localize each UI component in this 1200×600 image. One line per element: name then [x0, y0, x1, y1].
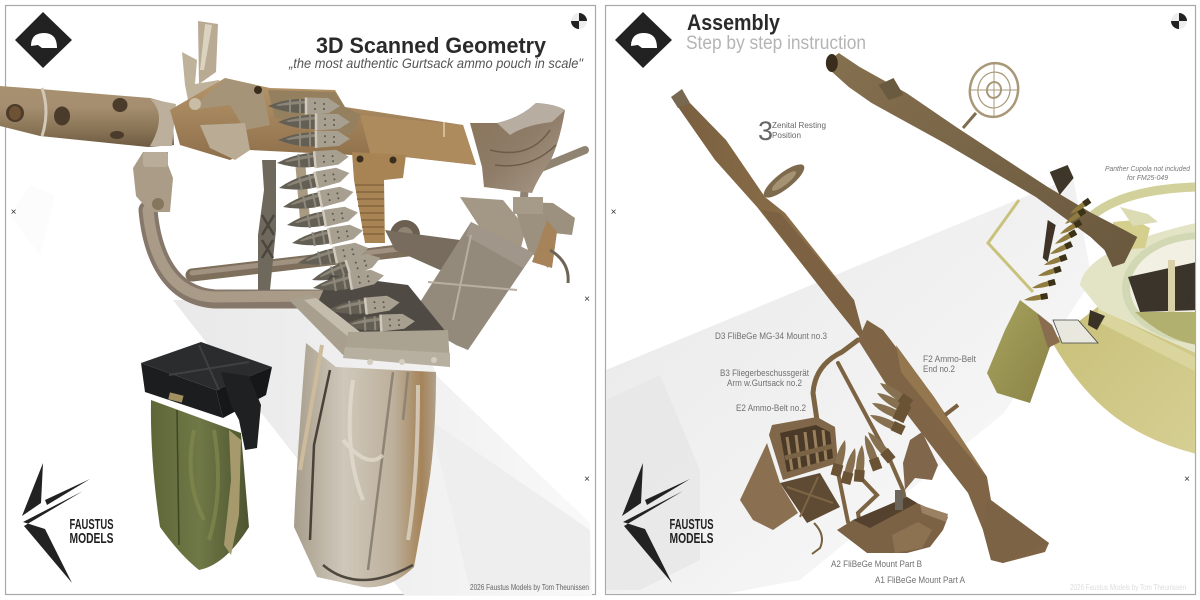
step caption: Zenital Resting [772, 120, 826, 130]
open lid [410, 222, 534, 350]
stock [470, 103, 565, 193]
crop marks: × [1184, 294, 1190, 305]
registration mark [571, 13, 587, 29]
crop marks: × [584, 474, 590, 485]
mount base [837, 490, 948, 553]
helmet logo [615, 12, 672, 68]
step caption [772, 120, 826, 140]
crop marks [11, 207, 590, 485]
registration mark [1171, 13, 1187, 29]
hull rim band [1098, 308, 1197, 372]
front bipod clevis [133, 152, 173, 212]
part labels: A1 FliBeGe Mount Part A [875, 575, 965, 585]
large canvas pouch [294, 343, 436, 587]
barrel and receiver [826, 53, 1137, 267]
yellow mount arm [988, 200, 1033, 292]
title: 3D Scanned Geometry [316, 33, 547, 58]
crop marks: × [11, 207, 17, 218]
crop marks: × [1184, 474, 1190, 485]
panel frame [606, 6, 1196, 594]
muzzle and barrel [671, 89, 866, 345]
cupola note [1105, 164, 1191, 182]
Faustus Models logo [22, 463, 114, 583]
helmet logo [15, 12, 72, 68]
small open box [1053, 310, 1105, 343]
dark green pouch [141, 342, 272, 570]
Faustus Models logo: FAUSTUS [70, 516, 114, 533]
ammunition belt [831, 379, 913, 485]
crop marks: × [611, 207, 617, 218]
trigger plate [258, 160, 276, 290]
upper right mount bracket [385, 150, 585, 283]
part labels: Arm w.Gurtsack no.2 [727, 378, 802, 388]
ammunition belt [1023, 198, 1091, 303]
part labels: E2 Ammo-Belt no.2 [736, 403, 806, 413]
cupola hull [1052, 300, 1197, 454]
mount arm [148, 210, 425, 299]
part labels: End no.2 [923, 364, 955, 374]
magazine grip [295, 152, 406, 243]
copyright: 2026 Faustus Models by Tom Theunissen [470, 583, 589, 592]
Faustus Models logo: MODELS [70, 530, 114, 547]
title: Assembly [687, 10, 781, 35]
stone background band [606, 177, 1092, 594]
part labels: A2 FliBeGe Mount Part B [831, 559, 922, 569]
gun model with ammo pouch mount [0, 21, 585, 587]
part labels: F2 Ammo-Belt [923, 354, 977, 364]
cupola note: for FM25-049 [1127, 173, 1169, 182]
subtitle: „the most authentic Gurtsack ammo pouch in scale" [288, 55, 584, 71]
panel: assembly [600, 0, 1200, 600]
open ammo box [289, 267, 450, 367]
crop marks [611, 207, 1190, 485]
Faustus Models logo: MODELS [670, 530, 714, 547]
subtitle: Step by step instruction [686, 33, 866, 54]
step number: 3 [758, 116, 773, 146]
part labels [715, 331, 977, 585]
Faustus Models logo: FAUSTUS [670, 516, 714, 533]
panel frame [6, 6, 596, 594]
yellow cupola with second gun [826, 53, 1200, 454]
sight ring [963, 59, 1023, 128]
part labels: D3 FliBeGe MG-34 Mount no.3 [715, 331, 827, 341]
Faustus Models logo [622, 463, 714, 583]
ammo pouch with open box [740, 417, 840, 554]
part labels: B3 Fliegerbeschussgerät [720, 368, 810, 378]
ammunition belt [268, 98, 383, 288]
receiver and stock [858, 320, 1049, 563]
pan sight [759, 159, 809, 203]
rear sight [182, 21, 224, 105]
brown assembled gun [671, 89, 1049, 563]
step caption: Position [772, 130, 801, 140]
receiver [170, 78, 476, 165]
crop marks: × [584, 294, 590, 305]
olive pouch [987, 300, 1060, 403]
cupola ring and interior [1080, 187, 1200, 355]
cupola note: Panther Cupola not included [1105, 164, 1191, 173]
panel: 3D scanned geometry [0, 0, 600, 600]
barrel jacket [0, 86, 176, 147]
mount arms [813, 340, 905, 525]
stone background band [10, 185, 592, 595]
